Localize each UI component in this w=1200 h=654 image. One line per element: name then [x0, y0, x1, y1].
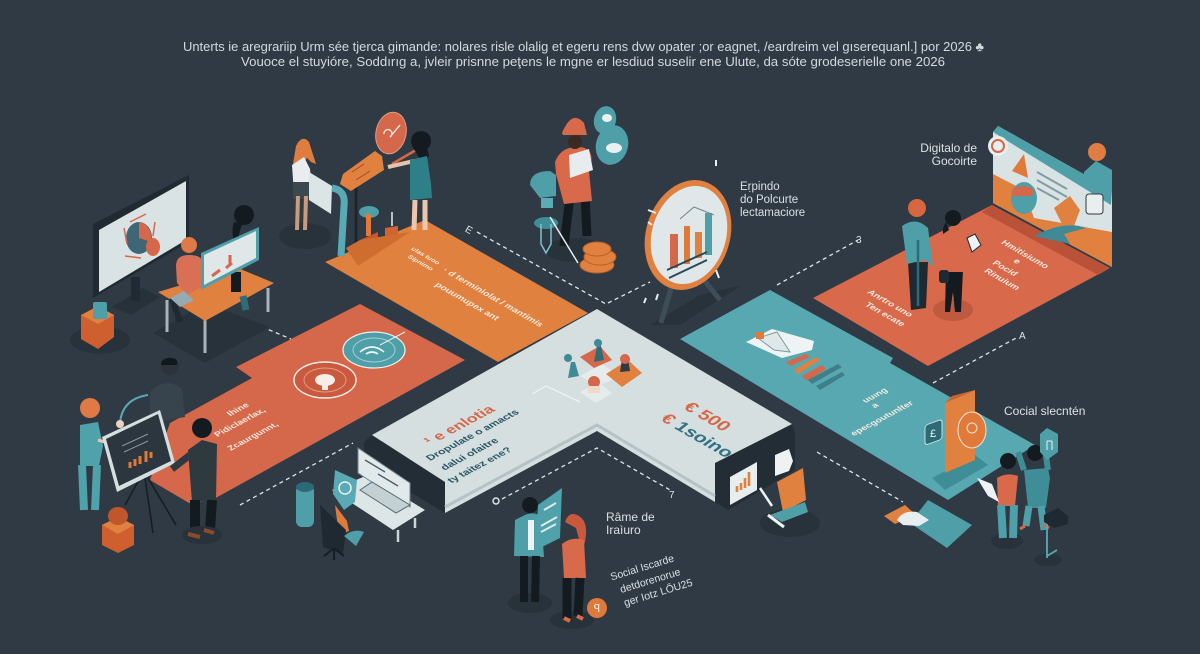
panel text: orange platform: pouumupex ant — [433, 281, 502, 322]
label: social block: Social Iscarde — [609, 553, 676, 583]
panel text: teal platform: uuıng — [860, 386, 890, 404]
desk — [332, 475, 425, 530]
speech badge: £ — [930, 428, 936, 440]
panel: central light platform — [364, 309, 820, 537]
dashed connector lines: A — [1019, 331, 1026, 342]
pedestal with plant — [346, 206, 410, 266]
panel text: left red platform — [212, 401, 281, 452]
panel text: teal platform: a — [869, 401, 882, 409]
man in teal — [902, 199, 933, 310]
laptop screen — [358, 448, 410, 513]
white board — [309, 172, 332, 214]
text: light platform body: Dropulate o amacts — [424, 408, 522, 463]
document icon — [746, 329, 814, 358]
panel text: left red platform: Ihine — [224, 401, 251, 417]
laptop on desk — [170, 291, 194, 307]
icon: badges — [988, 136, 1103, 214]
panel: orange platform — [325, 220, 588, 362]
dashed connector lines: 7 — [669, 490, 675, 501]
panel text: right red platform: Ten ecate — [863, 301, 908, 328]
mat with objects — [884, 500, 972, 548]
label: digital heading: Gocoirte — [932, 154, 977, 168]
teal sign — [536, 488, 562, 550]
shield icon — [333, 470, 357, 510]
label: target chart: lectamaciore — [740, 207, 805, 219]
title: Vouoce el stuyióre, Soddırıg a, jvleir prisnne peţens le mgne er lesdiud suselir ene Ulute, da sóte grodeserielle one 2026 — [241, 54, 945, 69]
kiosk on teal platform — [925, 390, 988, 490]
panel text: orange platform: · d terminiolat / mantimis — [441, 266, 546, 328]
figure group: couple at bottom — [508, 488, 607, 629]
clipboard — [569, 149, 593, 178]
spark marks — [644, 160, 719, 303]
text: enlotia heading: ¹ e enlotia — [421, 403, 499, 448]
coin stack — [580, 242, 616, 273]
dashed connector lines: E — [463, 224, 474, 237]
label: target chart: do Polcurte — [740, 194, 798, 206]
figure group: right women — [884, 428, 1068, 566]
legs — [564, 196, 587, 246]
woman in teal — [80, 398, 112, 510]
panel text: right red platform: Pocid — [990, 259, 1020, 278]
screen content — [1011, 154, 1086, 244]
panel text: orange platform: Sipnimo — [406, 254, 435, 272]
text: light platform body: dalui ofaitre — [439, 437, 502, 472]
panel text: right red platform: Anrtro uno — [865, 288, 916, 319]
game pieces — [532, 339, 642, 403]
woman in teal — [388, 131, 432, 230]
panel: right red platform — [813, 205, 1110, 366]
panel: left red platform — [150, 304, 465, 503]
figure: target chart on easel — [631, 160, 745, 325]
desk screen — [201, 227, 259, 292]
figure: worker with hat — [530, 104, 633, 273]
hexagon badge — [1040, 428, 1058, 460]
gauge: teal circle — [343, 332, 405, 368]
panel text: left red platform: Pidiclaerlax, — [212, 406, 268, 438]
figure group: monitor and desk — [70, 175, 274, 363]
wall monitor — [93, 175, 189, 315]
label: digital heading: Digitalo de — [920, 141, 977, 155]
label: digital heading — [920, 141, 977, 168]
figure: seated person in orange chair — [760, 468, 820, 537]
label: social block — [609, 553, 694, 609]
teal bubbles — [591, 104, 633, 168]
figure group: two women with sign — [279, 109, 432, 266]
man with teal sign — [508, 497, 552, 613]
desk — [153, 268, 274, 363]
screen: mini chart — [730, 449, 793, 505]
panel text: right red platform: Hmitisiumo — [999, 238, 1052, 270]
label: role block: Iraìuro — [606, 523, 641, 537]
title — [183, 39, 984, 69]
woman in orange — [550, 514, 594, 629]
teal machine — [530, 171, 558, 253]
label: target chart: Eṛpindo — [740, 181, 780, 193]
label: social block: ger Iotz LŐU25 — [622, 575, 694, 609]
label: role block: Râme de — [606, 510, 655, 524]
panel text: right red platform: Rinuium — [982, 267, 1022, 292]
figure group: laptop desk bottom-left — [296, 448, 425, 560]
label: social block: detdorenorue — [619, 566, 682, 596]
orange sign — [340, 151, 384, 256]
title: Unterts ie aregrariip Urm sée tjerca gimande: nolares risle olalig et egeru rens dvw opater ;or eagnet, /eardreim vel gıserequanl.] por 2026 ♣ — [183, 39, 984, 54]
panel text: teal platform: epecgoutunlter — [848, 399, 916, 437]
text: light platform body: ty taitez ene? — [445, 446, 515, 485]
lamp stand — [1034, 508, 1068, 566]
display wall — [988, 126, 1112, 267]
bars in target — [667, 207, 714, 278]
presenter — [1084, 143, 1112, 190]
coin icon: ꟼ — [594, 603, 600, 615]
side cube — [70, 302, 130, 354]
panel: teal platform — [680, 290, 1035, 500]
teal arc — [120, 395, 148, 423]
panel text: left red platform: Zcaurgunnt, — [225, 420, 281, 452]
gauge: red circle — [294, 362, 356, 398]
cane — [550, 217, 578, 263]
woman with paper — [977, 453, 1023, 549]
man in black — [172, 418, 222, 544]
label: role block — [606, 510, 655, 537]
shirt — [555, 147, 592, 204]
woman with raised arms — [1018, 445, 1050, 530]
tripod — [125, 478, 176, 533]
text: price values: € 1soino — [657, 410, 738, 461]
seated man at desk — [172, 237, 203, 322]
head and hat — [562, 118, 587, 149]
panel text: orange platform — [406, 246, 546, 328]
speech bubble — [372, 109, 410, 157]
presentation board — [102, 410, 175, 492]
orange post box — [102, 507, 134, 553]
label: target chart — [740, 181, 805, 219]
panel text: orange platform: ulas tuoo — [409, 246, 441, 266]
coin icon — [587, 598, 607, 618]
panel text: right red platform — [863, 238, 1052, 328]
figure group: presentation at left — [80, 357, 222, 553]
bar chart on teal platform — [786, 354, 845, 390]
figure: couple on red platform — [902, 199, 981, 321]
panel text: right red platform: e — [1011, 257, 1023, 265]
teal cylinder — [296, 482, 314, 527]
person on chair — [320, 505, 364, 560]
teal strip — [332, 188, 344, 256]
woman behind screen — [232, 205, 254, 310]
woman with tablet — [939, 210, 981, 312]
woman with orange hair — [292, 139, 316, 230]
man in back — [150, 357, 185, 423]
dashed connector lines — [240, 224, 1026, 505]
label: social heading: Cocial slecntén — [1004, 404, 1085, 418]
dashed connector lines: 3 — [856, 235, 862, 246]
text: price values: € 500 — [679, 399, 735, 434]
